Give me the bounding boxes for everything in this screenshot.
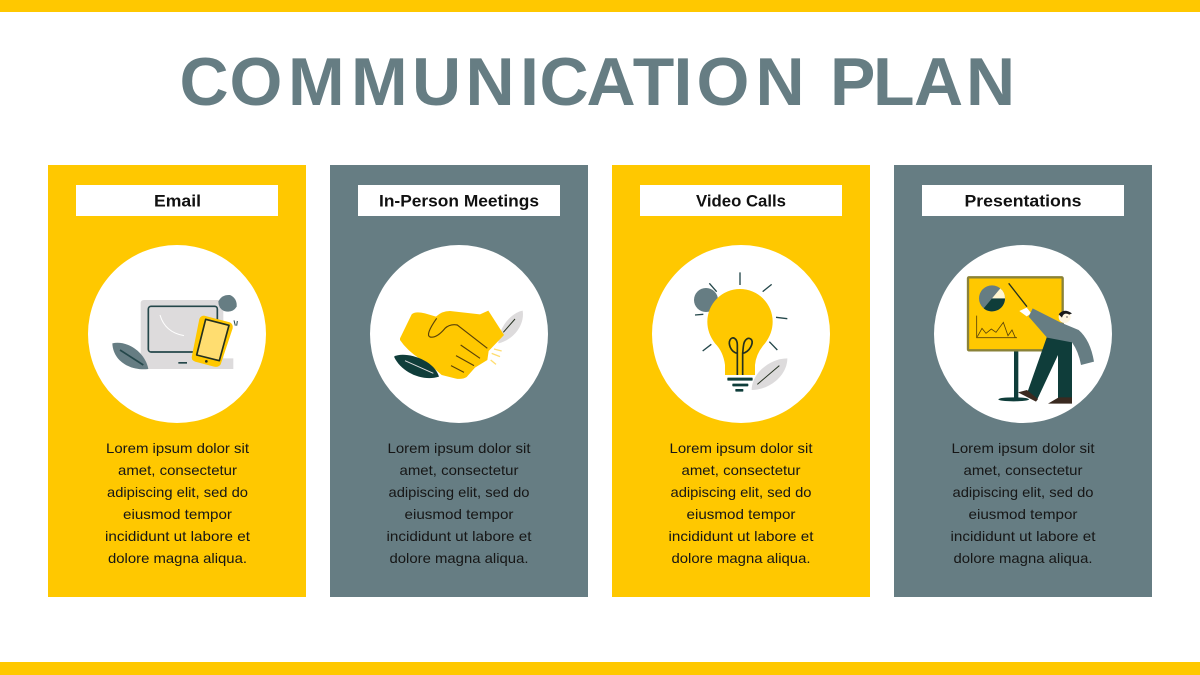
body text: presentations: Lorem ipsum dolor sit (952, 440, 1095, 456)
body text: video calls: dolore magna aliqua. (672, 550, 810, 566)
heading: in-person meetings: In-Person Meetings (379, 192, 539, 210)
body text: presentations: incididunt ut labore et (950, 528, 1096, 544)
body text: in-person meetings: Lorem ipsum dolor sit (388, 440, 531, 456)
heading: video calls (640, 185, 842, 216)
panel: in-person meetings (330, 165, 588, 597)
heading: presentations: Presentations (964, 192, 1082, 210)
body text: email: amet, consectetur (118, 462, 237, 478)
heading: in-person meetings (358, 185, 560, 216)
heading: email: Email (154, 192, 201, 210)
body text: in-person meetings (386, 440, 532, 566)
top bar (0, 0, 1200, 12)
body text: presentations (950, 440, 1096, 566)
body text: email: incididunt ut labore et (105, 528, 250, 544)
body text: email: dolore magna aliqua. (108, 550, 247, 566)
icon: light bulb (652, 245, 830, 423)
heading: presentations (922, 185, 1124, 216)
body text: in-person meetings: adipiscing elit, sed do (388, 484, 530, 500)
body text: in-person meetings: incididunt ut labore et (386, 528, 532, 544)
body text: email: eiusmod tempor (123, 506, 232, 522)
body text: presentations: eiusmod tempor (968, 506, 1078, 522)
body text: presentations: amet, consectetur (964, 462, 1083, 478)
heading: video calls: Video Calls (696, 192, 786, 210)
body text: video calls: Lorem ipsum dolor sit (670, 440, 813, 456)
body text: video calls (668, 440, 814, 566)
body text: presentations: dolore magna aliqua. (954, 550, 1092, 566)
body text: in-person meetings: eiusmod tempor (404, 506, 514, 522)
body text: in-person meetings: amet, consectetur (400, 462, 519, 478)
icon: presenter at board (934, 245, 1112, 423)
body text: presentations: adipiscing elit, sed do (952, 484, 1094, 500)
icon: handshake (370, 245, 548, 423)
bottom bar (0, 662, 1200, 675)
body text: email: Lorem ipsum dolor sit (106, 440, 249, 456)
panel: presentations (894, 165, 1152, 597)
heading: email (76, 185, 278, 216)
body text: video calls: adipiscing elit, sed do (670, 484, 812, 500)
body text: email (105, 440, 250, 566)
panel: email (48, 165, 306, 597)
icon: laptop and phone (88, 245, 266, 423)
body text: video calls: amet, consectetur (682, 462, 801, 478)
body text: in-person meetings: dolore magna aliqua. (390, 550, 528, 566)
body text: video calls: incididunt ut labore et (668, 528, 814, 544)
body text: video calls: eiusmod tempor (686, 506, 796, 522)
panel: video calls (612, 165, 870, 597)
title: COMMUNICATION PLAN (180, 44, 1015, 120)
body text: email: adipiscing elit, sed do (107, 484, 248, 500)
